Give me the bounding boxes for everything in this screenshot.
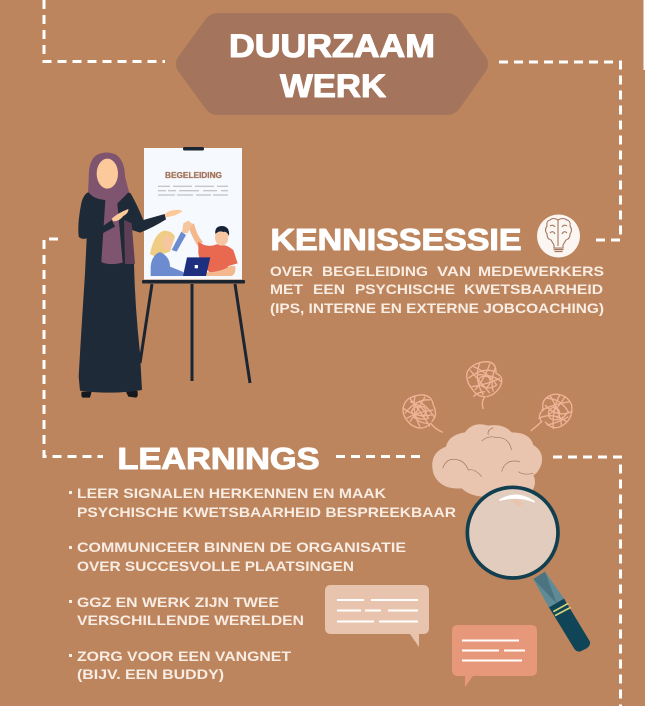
text block: kennissessie description: BEGELEIDING bbox=[322, 263, 428, 279]
text block: kennissessie description: VAN bbox=[437, 263, 471, 279]
title text: DUURZAAM bbox=[229, 28, 435, 64]
text block: kennissessie description: PSYCHISCHE bbox=[355, 281, 455, 297]
text block: kennissessie description bbox=[270, 263, 604, 316]
learning 2: COMMUNICEER BINNEN DE ORGANISATIE bbox=[77, 539, 406, 555]
learning 2 bbox=[69, 539, 406, 574]
tangled thought right bbox=[531, 394, 572, 431]
text block: kennissessie description: OVER bbox=[270, 263, 313, 279]
text block: kennissessie description: (IPS, INTERNE EN EXTERNE JOBCOACHING) bbox=[270, 300, 604, 316]
title banner bbox=[176, 13, 488, 115]
magnifying glass bbox=[467, 487, 590, 652]
speech bubble 1 bbox=[325, 585, 429, 647]
text block: kennissessie description: KWETSBAARHEID bbox=[464, 281, 603, 297]
learning 1: LEER SIGNALEN HERKENNEN EN MAAK bbox=[77, 485, 386, 501]
flip chart on easel: BEGELEIDING bbox=[165, 171, 222, 180]
text block: kennissessie description: MET bbox=[270, 281, 303, 297]
text block: kennissessie description: MEDEWERKERS bbox=[478, 263, 604, 279]
learning 1 bbox=[69, 485, 456, 520]
list: learnings bbox=[69, 485, 456, 682]
learning 4: ZORG VOOR EEN VANGNET bbox=[77, 648, 291, 664]
learning 4 bbox=[69, 648, 291, 682]
speech bubble 2 bbox=[452, 625, 537, 687]
text block: kennissessie description: EEN bbox=[313, 281, 345, 297]
learning 4: (BIJV. EEN BUDDY) bbox=[77, 666, 224, 682]
learning 3: VERSCHILLENDE WERELDEN bbox=[77, 612, 304, 628]
title text: WERK bbox=[280, 68, 387, 104]
brain bbox=[432, 424, 542, 497]
learning 2: OVER SUCCESVOLLE PLAATSINGEN bbox=[77, 558, 354, 574]
heading: learnings: LEARNINGS bbox=[118, 441, 320, 476]
heading: kennissessie: KENNISSESSIE bbox=[270, 222, 522, 257]
presenter illustration with flip chart bbox=[78, 147, 250, 398]
learning 3: GGZ EN WERK ZIJN TWEE bbox=[77, 594, 279, 610]
two colleagues high-fiving at a laptop bbox=[150, 221, 238, 276]
tangled thought top bbox=[467, 362, 502, 409]
learning 3 bbox=[69, 594, 304, 628]
flip chart on easel bbox=[140, 147, 250, 383]
icon: light bulb with brain bbox=[537, 214, 580, 258]
title text bbox=[229, 28, 435, 104]
presenter woman bbox=[78, 152, 183, 398]
brain and magnifying glass illustration bbox=[403, 362, 590, 652]
tangled thought left bbox=[403, 395, 443, 432]
banner hexagon bbox=[176, 13, 488, 115]
learning 1: PSYCHISCHE KWETSBAARHEID BESPREEKBAAR bbox=[77, 504, 456, 520]
